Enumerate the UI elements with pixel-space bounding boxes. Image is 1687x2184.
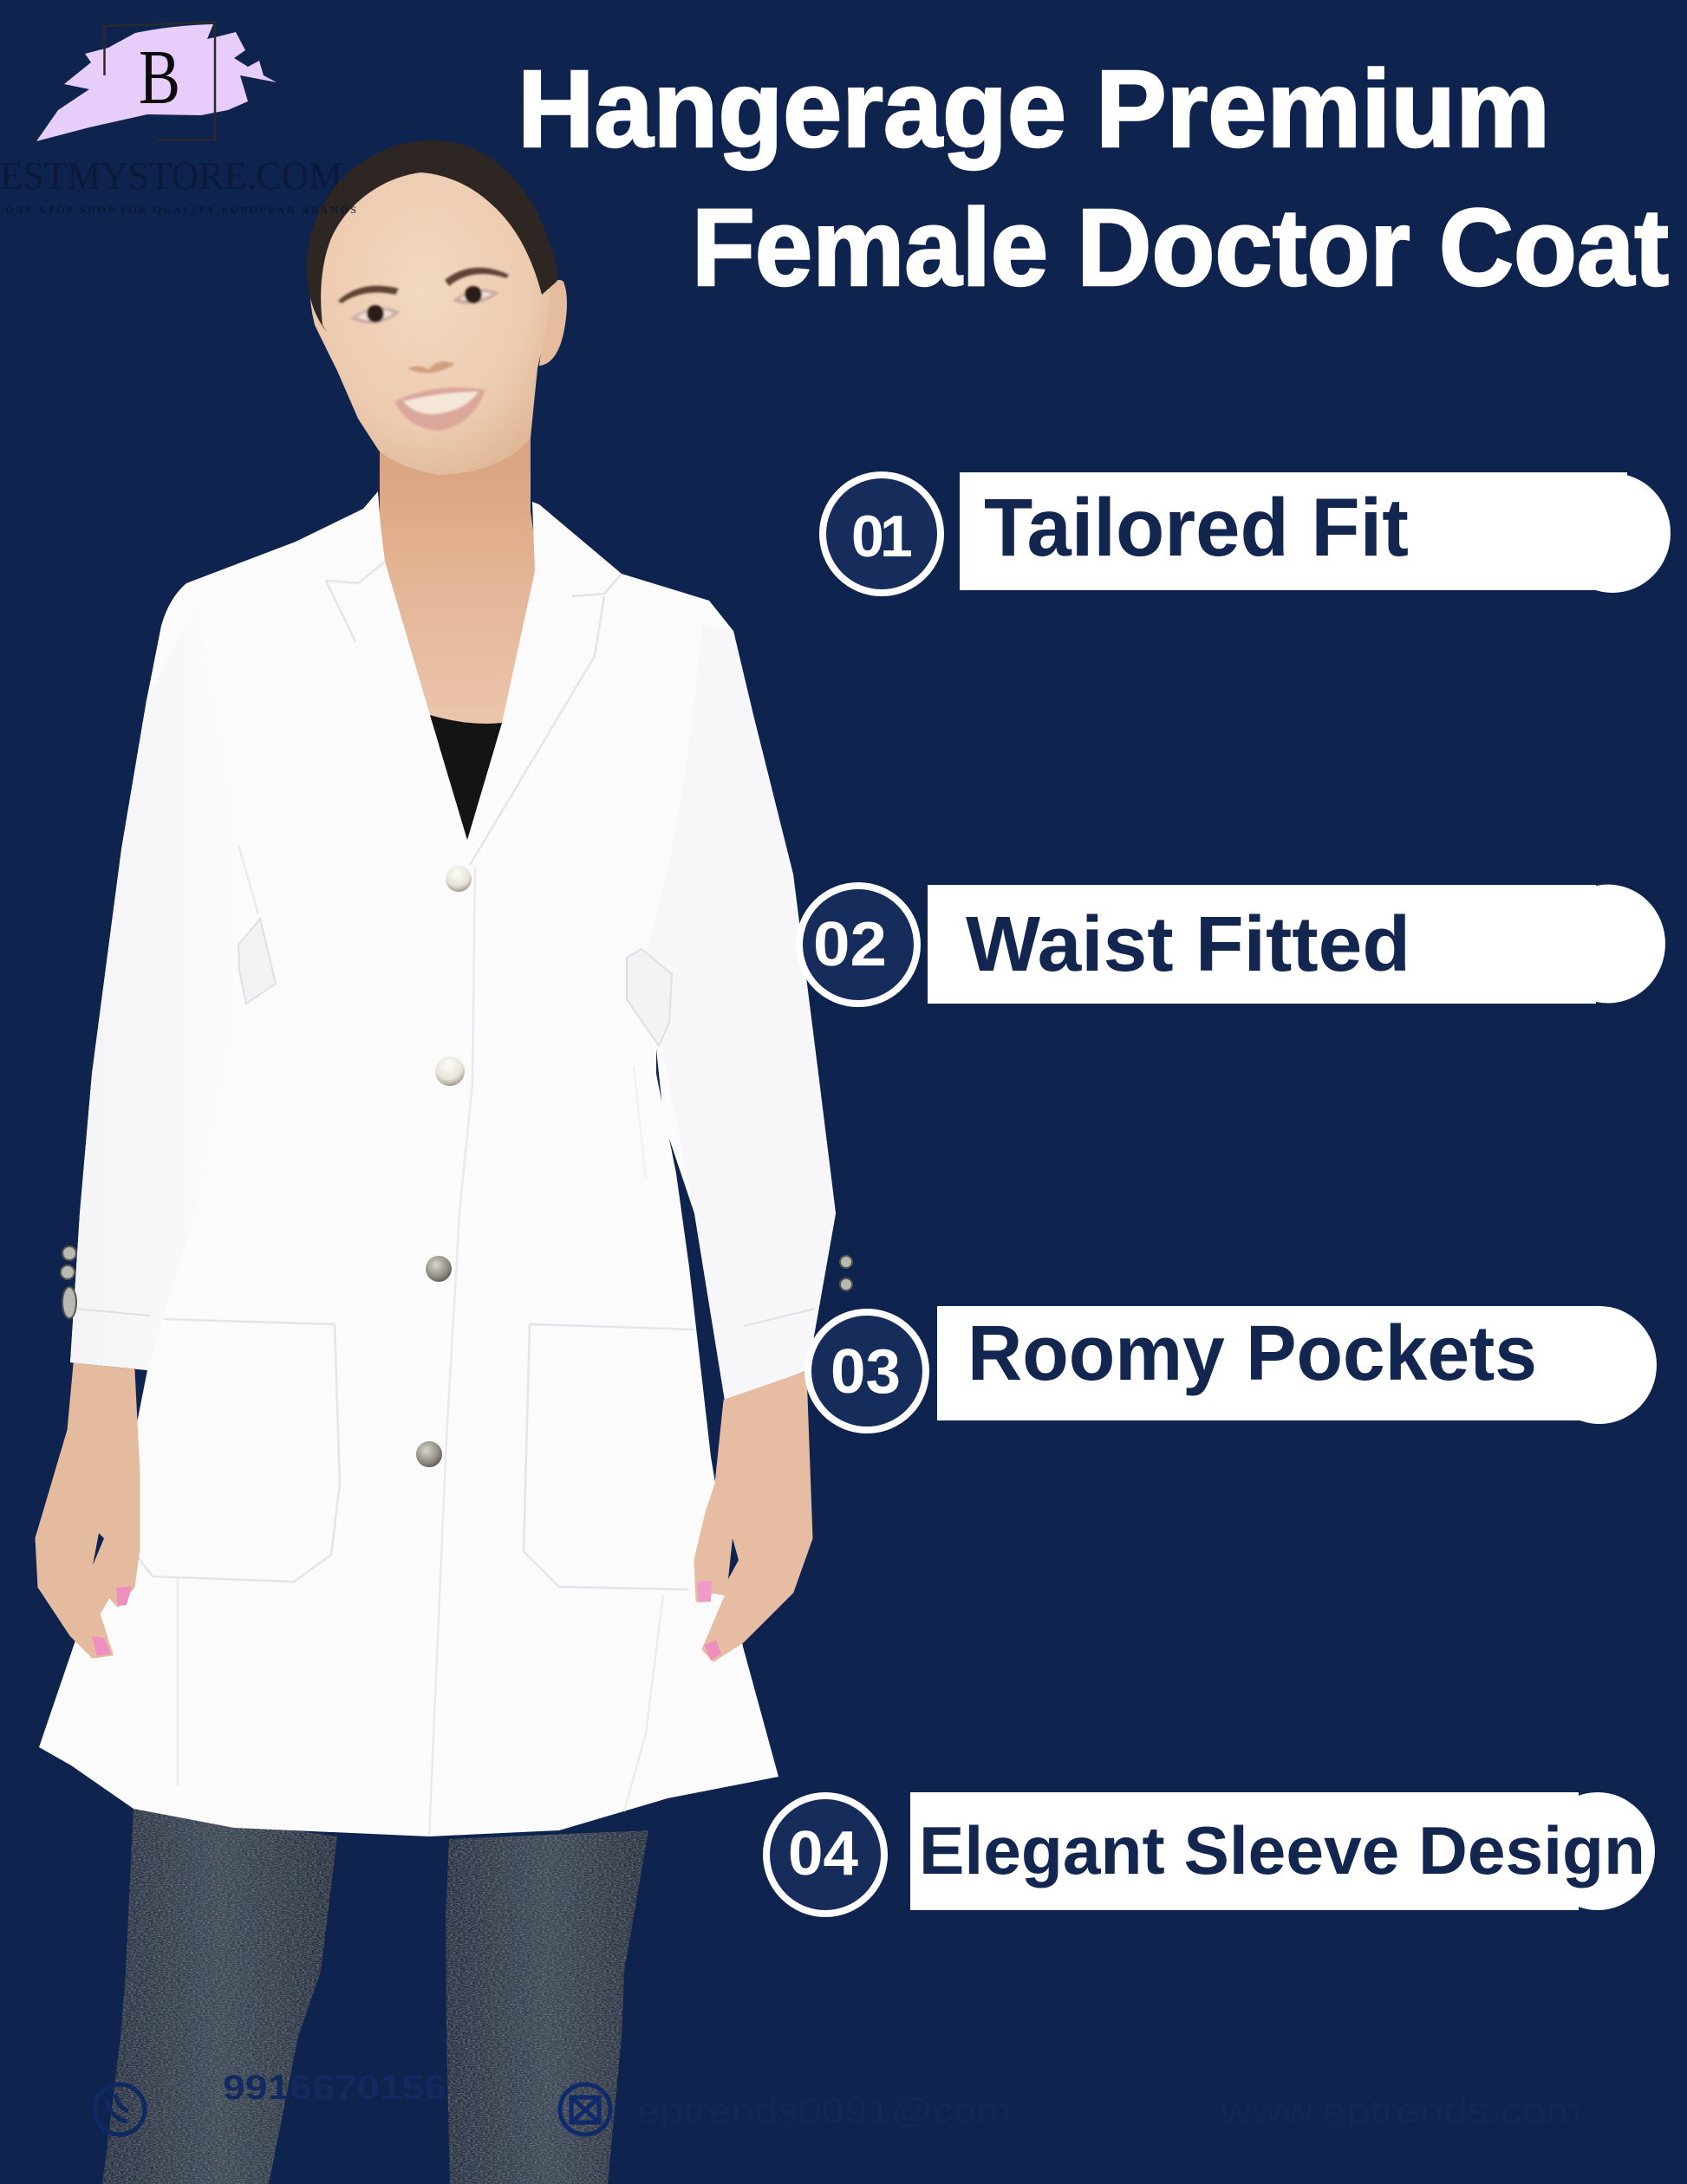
title line 1: Hangerage Premium	[518, 48, 1550, 170]
label pill	[910, 1792, 1655, 1910]
number badge	[808, 1312, 926, 1430]
feature 03	[808, 1306, 1657, 1430]
number badge	[823, 475, 941, 593]
number badge: 04	[788, 1819, 858, 1888]
number badge: 01	[851, 504, 913, 569]
model figure	[36, 140, 852, 1836]
mouth	[394, 387, 485, 431]
number badge	[799, 886, 917, 1004]
cuff hardware	[61, 1246, 852, 1318]
label pill	[960, 472, 1671, 593]
logo frame	[104, 23, 215, 140]
buttons	[416, 866, 472, 1467]
head: hair	[307, 140, 557, 332]
label pill: Elegant Sleeve Design	[919, 1812, 1645, 1888]
label pill: Tailored Fit	[984, 482, 1409, 574]
inner top	[430, 715, 502, 840]
ear	[539, 280, 567, 366]
waist tab: left	[238, 919, 276, 1004]
coat shading and seams	[70, 562, 836, 1836]
label pill	[928, 884, 1665, 1004]
number badge: 02	[813, 910, 887, 979]
icon: mail	[560, 2084, 610, 2135]
waist tab: right	[627, 949, 672, 1046]
phone number: 9916670156	[223, 2069, 446, 2107]
icon: phone	[94, 2084, 145, 2135]
number badge	[766, 1796, 884, 1914]
brows	[338, 286, 399, 303]
website: www.eptrends.com	[1220, 2092, 1581, 2130]
neck	[373, 416, 542, 745]
feature 04	[766, 1792, 1655, 1914]
number badge: 03	[830, 1337, 901, 1407]
left hand	[36, 1364, 139, 1657]
email: eptrends0091@com	[637, 2092, 1011, 2130]
right hand	[695, 1373, 811, 1661]
facial features	[338, 268, 509, 431]
head: face	[309, 156, 550, 475]
nose shadow	[407, 361, 455, 373]
title	[518, 48, 1669, 309]
feature 02	[799, 884, 1665, 1004]
label pill	[937, 1306, 1657, 1424]
icon: lavender brush stroke	[36, 24, 277, 141]
feature 01	[823, 472, 1671, 593]
footer contact strip	[94, 1807, 1581, 2184]
label pill: Roomy Pockets	[967, 1310, 1537, 1397]
logo tagline: ONE STOP SHOP FOR QUALITY EUROPEAN BRANDS	[6, 204, 356, 216]
pants	[102, 1807, 648, 2184]
logo	[0, 23, 342, 198]
logo wordmark: ESTMYSTORE.COM	[0, 154, 342, 198]
logo letter: B	[139, 35, 180, 120]
eyes	[350, 308, 401, 323]
label pill: Waist Fitted	[966, 901, 1410, 988]
cuff seams	[76, 1309, 815, 1326]
coat	[39, 491, 836, 1836]
